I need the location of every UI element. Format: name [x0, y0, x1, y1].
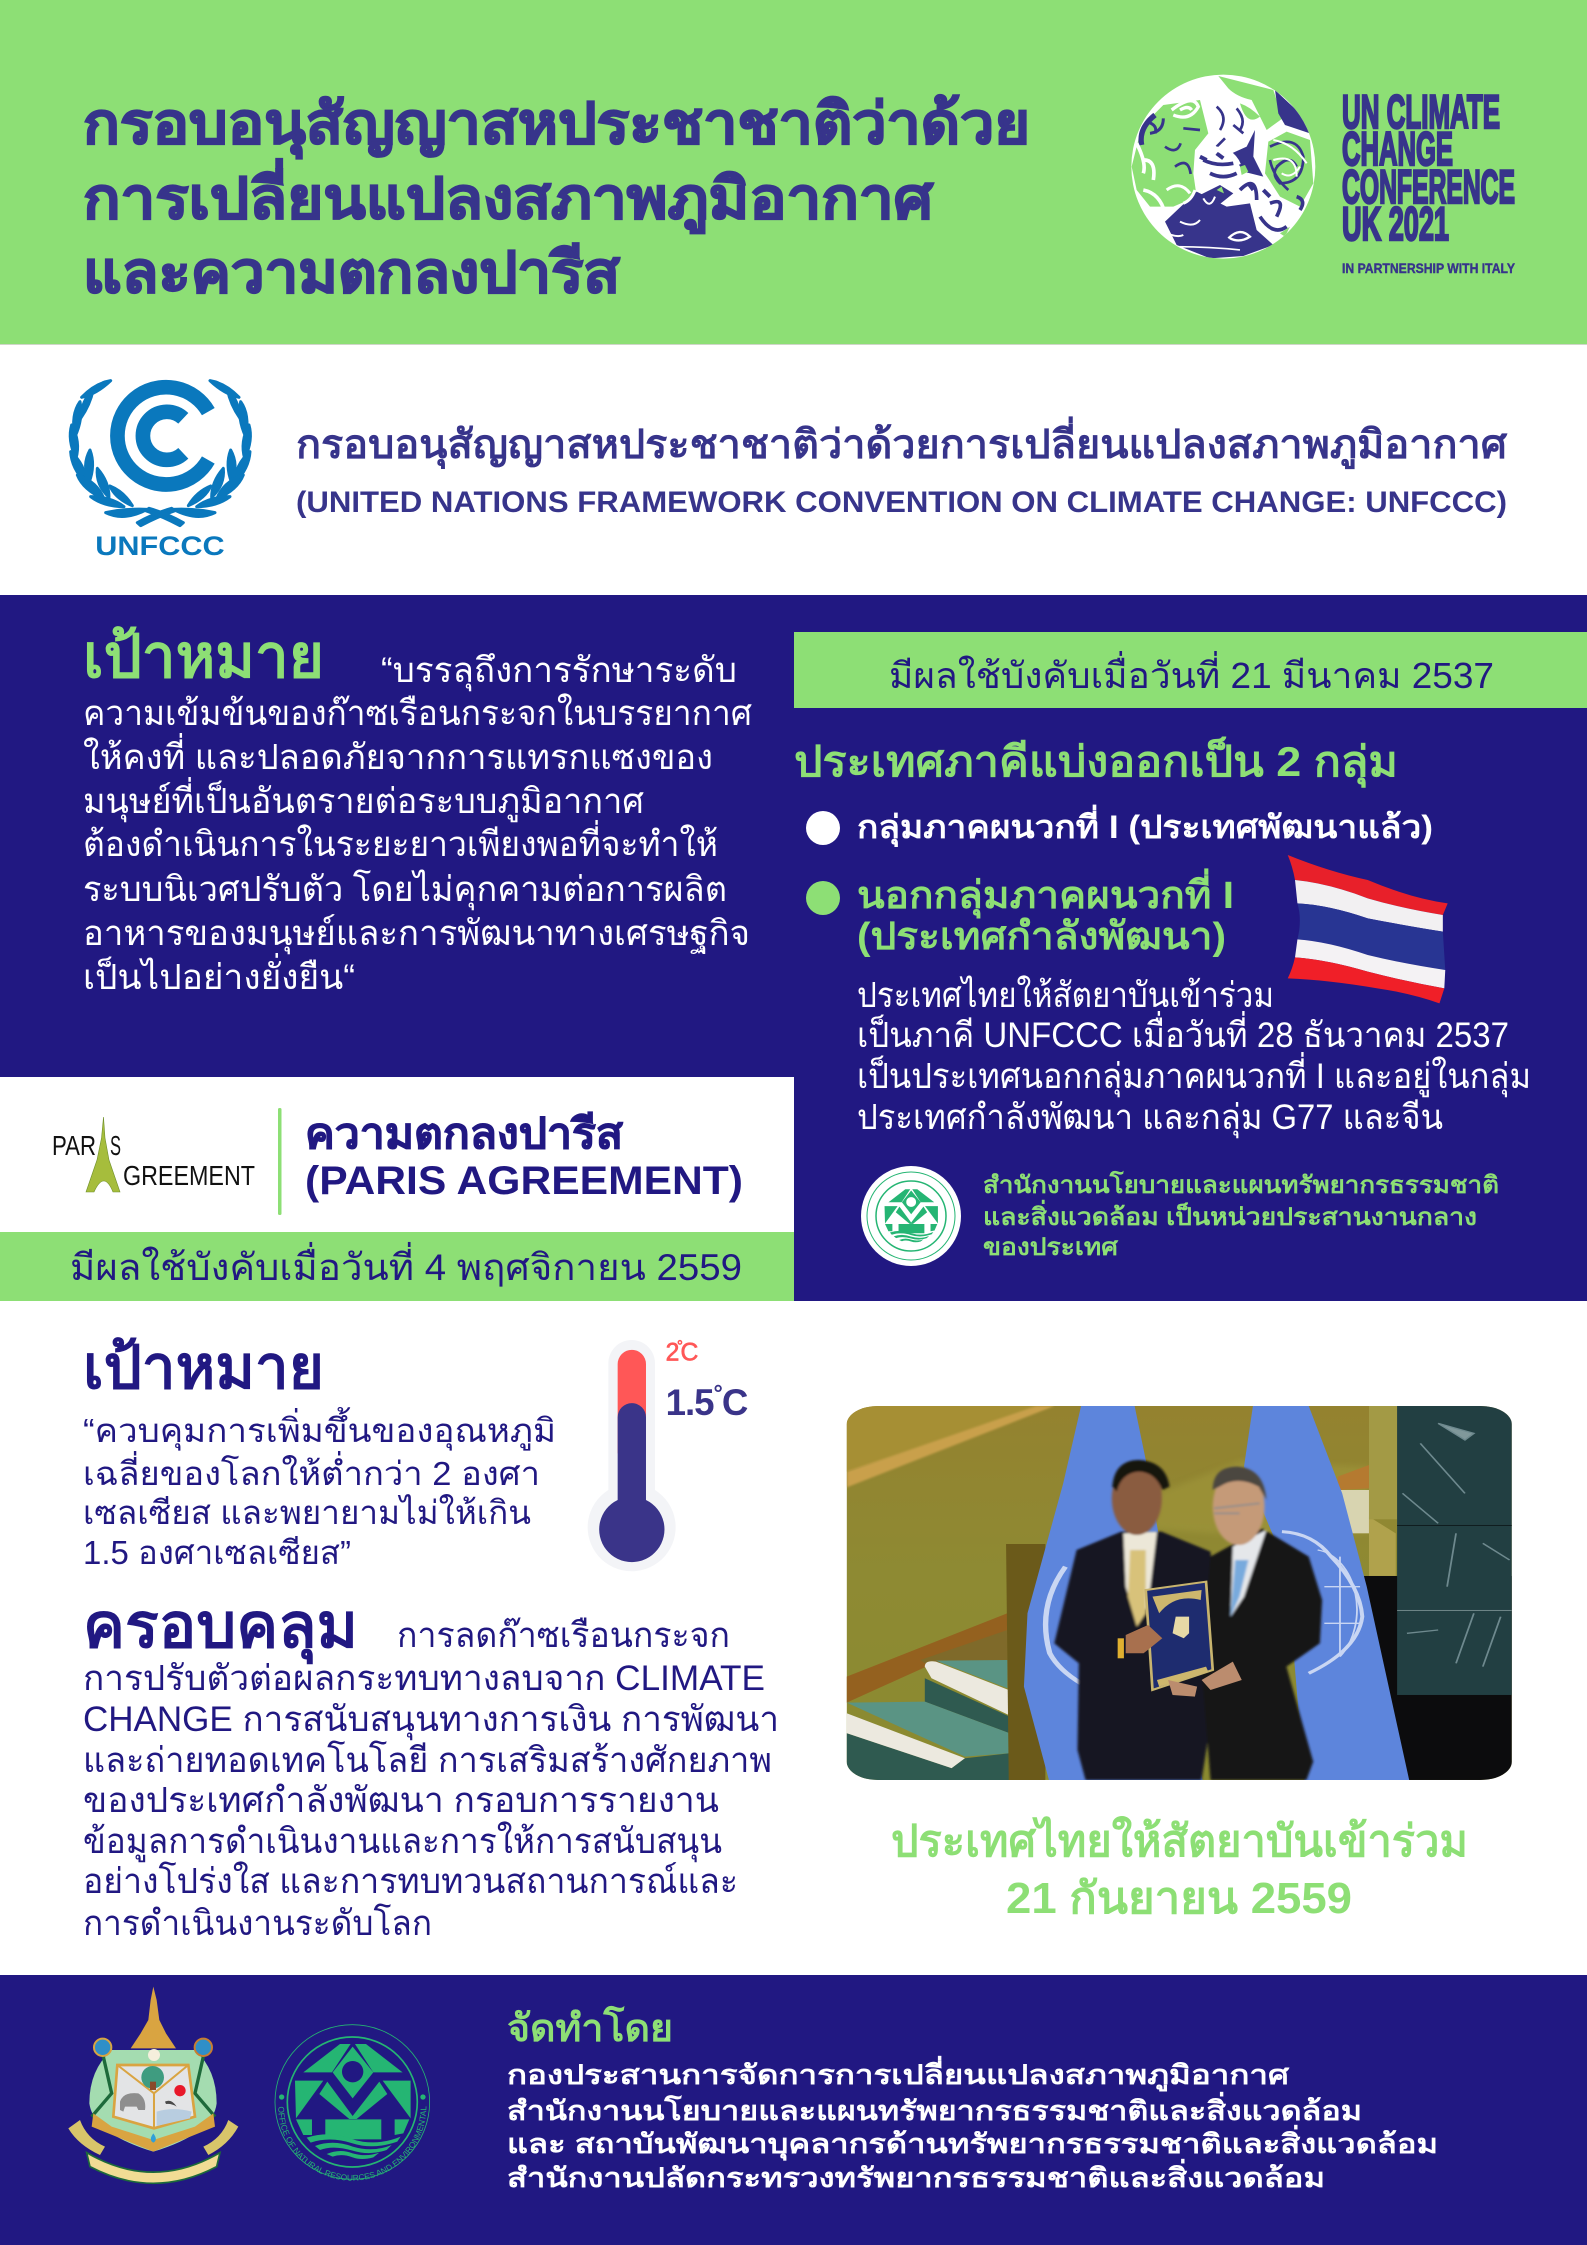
panel: UNFCCC parties [794, 595, 1587, 1301]
icon: UNFCCC logo: UNFCCC [95, 531, 225, 561]
Paris goal text: “ควบคุมการเพิ่มขึ้นของอุณหภูมิ [83, 1407, 556, 1451]
icon: ministry crest [68, 1987, 238, 2183]
footer organisations: และ สถาบันพัฒนาบุคลากรด้านทรัพยากรธรรมชาติและสิ่งแวดล้อม [507, 2124, 1438, 2161]
Paris effective date bar: มีผลใช้บังคับเมื่อวันที่ 4 พฤศจิกายน 2559 [70, 1241, 742, 1288]
coverage text: การลดก๊าซเรือนกระจก [397, 1616, 730, 1655]
Thailand ratification text: เป็นประเทศนอกกลุ่มภาคผนวกที่ I และอยู่ในกลุ่ม [857, 1052, 1531, 1097]
goal text: มนุษย์ที่เป็นอันตรายต่อระบบภูมิอากาศ [83, 777, 644, 822]
label 1.5°C: C [722, 1382, 748, 1423]
Thailand ratification text: ประเทศไทยให้สัตยาบันเข้าร่วม [857, 975, 1274, 1015]
group: Annex I [806, 804, 1433, 848]
effective date bar [794, 632, 1587, 708]
coordinating agency text: ของประเทศ [983, 1234, 1119, 1261]
Paris goal text: เซลเซียส และพยายามไม่ให้เกิน [83, 1494, 531, 1531]
Paris goal text [83, 1407, 556, 1571]
icon: Paris Agreement logo: PAR [52, 1130, 96, 1161]
icon: Paris Agreement logo: GREEMENT [123, 1160, 255, 1191]
effective date bar: มีผลใช้บังคับเมื่อวันที่ 21 มีนาคม 2537 [889, 651, 1494, 696]
coordinating agency text [983, 1170, 1499, 1261]
photo caption: ประเทศไทยให้สัตยาบันเข้าร่วม [891, 1815, 1468, 1866]
divider [278, 1108, 282, 1215]
Paris effective date bar [0, 1232, 794, 1301]
coverage text: CHANGE การสนับสนุนทางการเงิน การพัฒนา [83, 1700, 779, 1740]
coverage text: ข้อมูลการดำเนินงานและการให้การสนับสนุน [83, 1821, 722, 1862]
main title: และความตกลงปารีส [83, 241, 620, 305]
coverage text: การปรับตัวต่อผลกระทบทางลบจาก CLIMATE [83, 1659, 765, 1698]
icon: Paris Agreement logo: S [110, 1130, 121, 1161]
coverage text: และถ่ายทอดเทคโนโลยี การเสริมสร้างศักยภาพ [83, 1740, 772, 1780]
icon: Paris Agreement logo [52, 1117, 255, 1192]
photo: ratification ceremony [847, 1406, 1512, 1780]
coverage text: อย่างโปร่งใส และการทบทวนสถานการณ์และ [83, 1861, 738, 1901]
label 2°C: 2 [666, 1340, 679, 1367]
Paris goal heading: เป้าหมาย [83, 1334, 324, 1401]
footer organisations: สำนักงานนโยบายและแผนทรัพยากรธรรมชาติและสิ่งแวดล้อม [507, 2091, 1362, 2126]
goal text: อาหารของมนุษย์และการพัฒนาทางเศรษฐกิจ [83, 914, 750, 954]
UNFCCC English heading: (UNITED NATIONS FRAMEWORK CONVENTION ON CLIMATE CHANGE: UNFCCC) [296, 486, 1507, 519]
goal text: ระบบนิเวศปรับตัว โดยไม่คุกคามต่อการผลิต [83, 869, 727, 910]
group: Non-Annex I: (ประเทศกำลังพัฒนา) [857, 916, 1226, 958]
COP26 wordmark: CHANGE [1342, 122, 1453, 175]
goal text: ความเข้มข้นของก๊าซเรือนกระจกในบรรยากาศ [83, 693, 752, 733]
goal text: ให้คงที่ และปลอดภัยจากการแทรกแซงของ [83, 733, 713, 777]
panel: UNFCCC heading band [0, 344, 1587, 595]
footer organisations: กองประสานการจัดการการเปลี่ยนแปลงสภาพภูมิอากาศ [507, 2055, 1290, 2092]
panel: footer [0, 1975, 1587, 2245]
panel: Paris Agreement heading [0, 1077, 794, 1232]
Paris goal text: 1.5 องศาเซลเซียส” [83, 1534, 351, 1571]
group: Non-Annex I: นอกกลุ่มภาคผนวกที่ I [857, 868, 1234, 919]
panel: Paris goal [83, 1334, 556, 1571]
Paris Agreement Thai title: ความตกลงปารีส [305, 1110, 623, 1157]
Paris Agreement English title: (PARIS AGREEMENT) [305, 1159, 743, 1203]
coverage text [83, 1616, 779, 1943]
coordinating agency text: สำนักงานนโยบายและแผนทรัพยากรธรรมชาติ [983, 1170, 1499, 1199]
label 2°C: ° [677, 1339, 683, 1355]
group: Non-Annex I [806, 868, 1234, 958]
Thailand ratification text: เป็นภาคี UNFCCC เมื่อวันที่ 28 ธันวาคม 2537 [857, 1011, 1509, 1055]
header band [0, 0, 1587, 344]
footer organisations: สำนักงานปลัดกระทรวงทรัพยากรธรรมชาติและสิ่งแวดล้อม [507, 2158, 1325, 2193]
main title: กรอบอนุสัญญาสหประชาชาติว่าด้วย [83, 92, 1030, 160]
Thailand ratification text [857, 975, 1531, 1138]
goal text [83, 651, 752, 997]
icon: ONEP emblem [274, 2024, 430, 2181]
footer heading: จัดทำโดย [507, 2005, 673, 2050]
icon: thermometer [588, 1339, 748, 1571]
panel: Paris coverage [83, 1592, 779, 1943]
coverage heading: ครอบคลุม [83, 1592, 358, 1664]
COP26 wordmark [1342, 85, 1515, 276]
icon: UNFCCC logo [70, 381, 250, 561]
icon: Thai flag [1288, 855, 1448, 1003]
footer organisations [507, 2055, 1438, 2193]
main title: การเปลี่ยนแปลงสภาพภูมิอากาศ [83, 158, 934, 234]
photo caption [891, 1815, 1468, 1923]
UNFCCC Thai heading: กรอบอนุสัญญาสหประชาชาติว่าด้วยการเปลี่ยนแปลงสภาพภูมิอากาศ [296, 416, 1508, 470]
coverage text: ของประเทศกำลังพัฒนา กรอบการรายงาน [83, 1781, 719, 1820]
parties heading: ประเทศภาคีแบ่งออกเป็น 2 กลุ่ม [794, 736, 1398, 788]
icon: ONEP emblem: OFFICE OF NATURAL RESOURCES AND ENVIRONMENTAL POLICY AND PLANNING [278, 2106, 426, 2181]
coordinating agency text: และสิ่งแวดล้อม เป็นหน่วยประสานงานกลาง [983, 1199, 1477, 1231]
label 2°C: C [681, 1340, 698, 1367]
main title [83, 92, 1030, 305]
goal text: เป็นไปอย่างยั่งยืน“ [83, 953, 355, 997]
label 1.5°C: ° [714, 1380, 723, 1406]
goal text: ต้องดำเนินการในระยะยาวเพียงพอที่จะทำให้ [83, 820, 718, 864]
label 1.5°C: 1.5 [666, 1382, 715, 1423]
Thailand ratification text: ประเทศกำลังพัฒนา และกลุ่ม G77 และจีน [857, 1098, 1443, 1138]
Paris goal text: เฉลี่ยของโลกให้ต่ำกว่า 2 องศา [83, 1451, 540, 1492]
goal heading: เป้าหมาย [83, 623, 324, 690]
COP26 wordmark: UK 2021 [1342, 197, 1449, 250]
goal text: “บรรลุถึงการรักษาระดับ [381, 651, 737, 691]
panel: UNFCCC goal [0, 595, 794, 1077]
icon: ONEP logo white [861, 1166, 961, 1266]
coverage text: การดำเนินงานระดับโลก [83, 1903, 432, 1943]
icon: COP26 globe [1131, 75, 1315, 259]
COP26 wordmark: IN PARTNERSHIP WITH ITALY [1342, 261, 1515, 276]
photo caption: 21 กันยายน 2559 [1006, 1874, 1352, 1923]
group: Annex I: กลุ่มภาคผนวกที่ I (ประเทศพัฒนาแล้ว) [857, 804, 1433, 848]
